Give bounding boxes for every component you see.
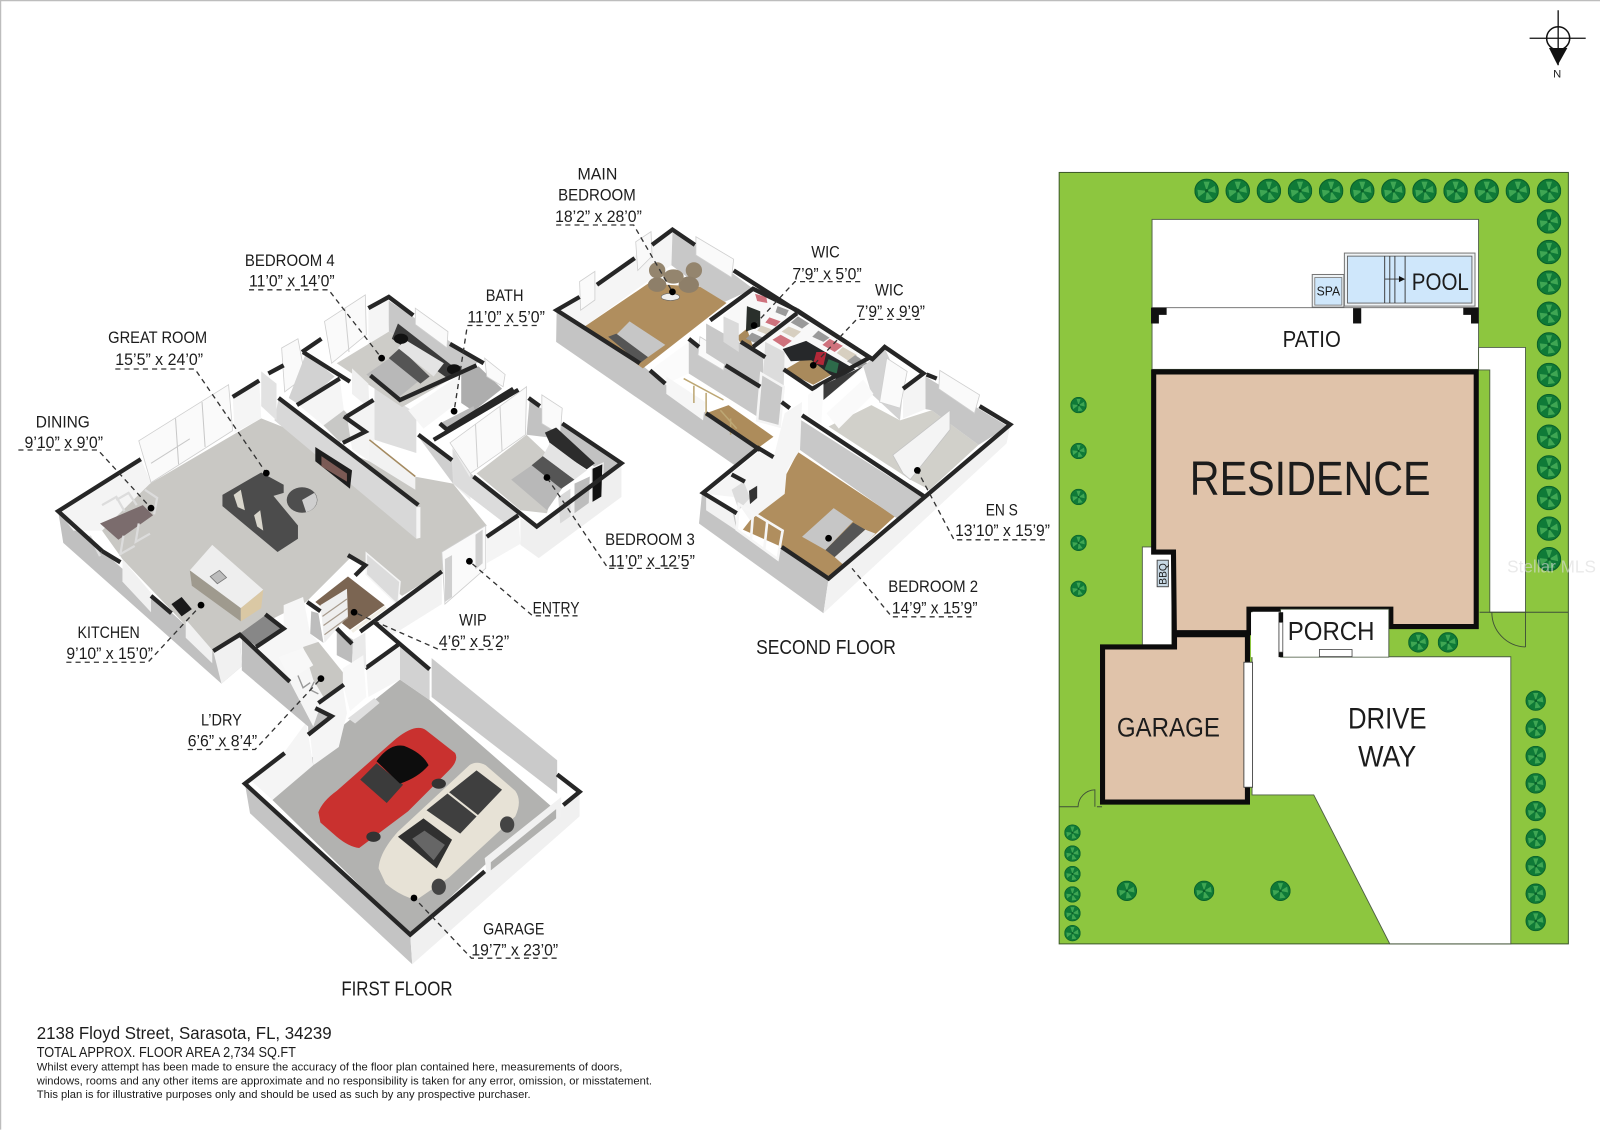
label: bedroom 3: BEDROOM 3 [605,531,695,549]
label: great room [108,329,270,476]
label: garage: 19’7” x 23’0” [471,942,558,960]
label: en suite: EN S [986,501,1018,519]
label: great room: GREAT ROOM [108,329,207,347]
label: dining: DINING [36,414,90,432]
label: garage [411,895,558,960]
label: walk-in pantry: WIP [459,612,487,630]
label: kitchen: 9’10” x 15’0” [66,645,153,663]
garage floor [272,680,551,935]
garage [1103,635,1253,802]
label: walk-in pantry: 4’6” x 5’2” [439,633,509,651]
garage black walls [245,621,580,935]
label: wic one: 7’9” x 5’0” [792,266,862,284]
lawn [1059,172,1568,944]
gray wall behind closets [706,323,763,384]
side path [1479,347,1526,612]
porch: PORCH [1288,618,1374,646]
label: en suite [914,467,1050,540]
black wall tops second floor [557,230,1010,579]
compass [1530,10,1586,81]
label: en suite: 13’10” x 15’9” [955,522,1050,540]
bedroom 3 [450,387,620,523]
great room floor [102,418,487,653]
fences and gates [1059,612,1568,807]
label: bath [451,287,545,415]
label: bedroom 2: 14’9” x 15’9” [892,599,978,617]
disclaimer line one: Whilst every attempt has been made to ensure the accuracy of the floor plan contained here, measurements of doors, [37,1061,622,1073]
round coffee table [287,487,317,513]
closet one [723,292,797,352]
disclaimer line three: This plan is for illustrative purposes only and should be used as such by any prospective purchaser. [37,1089,531,1101]
label: wic two: 7’9” x 9’9” [856,303,925,321]
spa: SPA [1317,283,1341,298]
driveway label [1348,703,1427,773]
address: 2138 Floyd Street, Sarasota, FL, 34239 [37,1023,332,1043]
label: wic one: WIC [811,244,840,262]
bbq nook [1142,547,1172,645]
label: bedroom 2 [825,535,978,617]
label: main bedroom [555,166,676,295]
sofa [222,472,298,552]
main bedroom white walls [557,230,672,327]
residence: RESIDENCE [1190,453,1431,506]
pool deck [1152,219,1479,369]
label: garage: GARAGE [483,921,544,939]
kitchen counters [122,559,212,663]
label: wic one [751,244,862,329]
white suv [379,763,519,900]
label: laundry [188,675,324,750]
label: kitchen: KITCHEN [78,624,140,642]
first floor 3D plan [58,295,621,735]
label: main bedroom: MAIN [578,166,617,184]
garage first floor [245,621,580,964]
pool [1344,253,1475,306]
driveway [1252,609,1511,944]
black wall tops first floor [58,297,621,735]
left wall and glazing [58,381,261,531]
label: laundry: 6’6” x 8’4” [188,732,257,750]
label: walk-in pantry [351,609,509,651]
label: wic two: WIC [875,281,904,299]
driveway label: DRIVE [1348,703,1427,736]
entry door [442,526,486,604]
walk-in closets [710,289,873,400]
dining table and chairs [90,490,157,556]
main bedroom bed [608,321,665,363]
disclaimer line two: windows, rooms and any other items are approximate and no responsibility is taken for any error, omission, or misstatement. [36,1076,652,1088]
patio [1151,308,1479,352]
room labels and leaders [18,166,1050,960]
kitchen island [190,545,263,621]
porch [1251,609,1389,657]
bbq nook: BBQ [1157,563,1169,585]
hallway [650,337,773,448]
site plan [1059,172,1596,944]
label: wic two [810,281,925,369]
label: main bedroom: 18’2” x 28’0” [555,208,642,226]
label: dining [18,414,154,512]
main bedroom floor [585,284,727,368]
label: entry [466,558,580,617]
red car [318,728,456,848]
label: bath: 11’0” x 5’0” [467,308,545,326]
main bedroom windows [580,232,734,310]
second floor title: SECOND FLOOR [756,637,896,659]
watermark: Stellar MLS [1507,556,1596,576]
fireplace wall [261,371,420,539]
bedroom 4 [324,295,480,408]
bath [408,358,505,430]
en suite [808,348,1008,490]
second floor exterior walls [556,311,1010,613]
kitchen back closet and pantry [315,553,400,643]
garage low wall [485,797,561,873]
spa [1312,274,1344,307]
label: bath: BATH [486,287,523,305]
bedroom 2 [706,402,921,577]
garage exterior walls [245,784,580,964]
address and disclaimer block [36,1023,652,1101]
hall and closets [282,339,517,523]
label: laundry: L’DRY [201,712,242,730]
second floor 3D plan [556,230,1010,613]
laundry room [258,597,366,727]
label: bedroom 3 [544,474,695,570]
compass: N [1553,69,1561,81]
first floor title: FIRST FLOOR [341,978,453,1000]
garage side walls [250,647,557,800]
label: bedroom 4: BEDROOM 4 [245,252,335,270]
pool: POOL [1412,269,1469,296]
label: bedroom 4: 11’0” x 14’0” [249,273,335,291]
gray kitchen floor return [240,615,282,647]
label: dining: 9’10” x 9’0” [24,434,103,452]
label: bedroom 3: 11’0” x 12’5” [608,552,695,570]
patio: PATIO [1283,326,1341,352]
label: great room: 15’5” x 24’0” [115,351,203,369]
driveway label: WAY [1358,740,1417,773]
label: kitchen [66,602,204,663]
exterior walls first floor [58,463,621,735]
trees [1065,179,1561,941]
main bedroom back wall [671,233,753,302]
closet two [757,315,873,400]
garage: GARAGE [1117,713,1220,743]
label: entry: ENTRY [533,599,580,617]
armchairs [648,262,702,301]
label: main bedroom: BEDROOM [558,187,636,205]
residence [1154,372,1476,647]
label: bedroom 2: BEDROOM 2 [888,578,978,596]
hall door [757,373,784,427]
label: bedroom 4 [245,252,385,362]
fireplace [315,447,352,489]
total floor area: TOTAL APPROX. FLOOR AREA 2,734 SQ.FT [37,1045,296,1061]
